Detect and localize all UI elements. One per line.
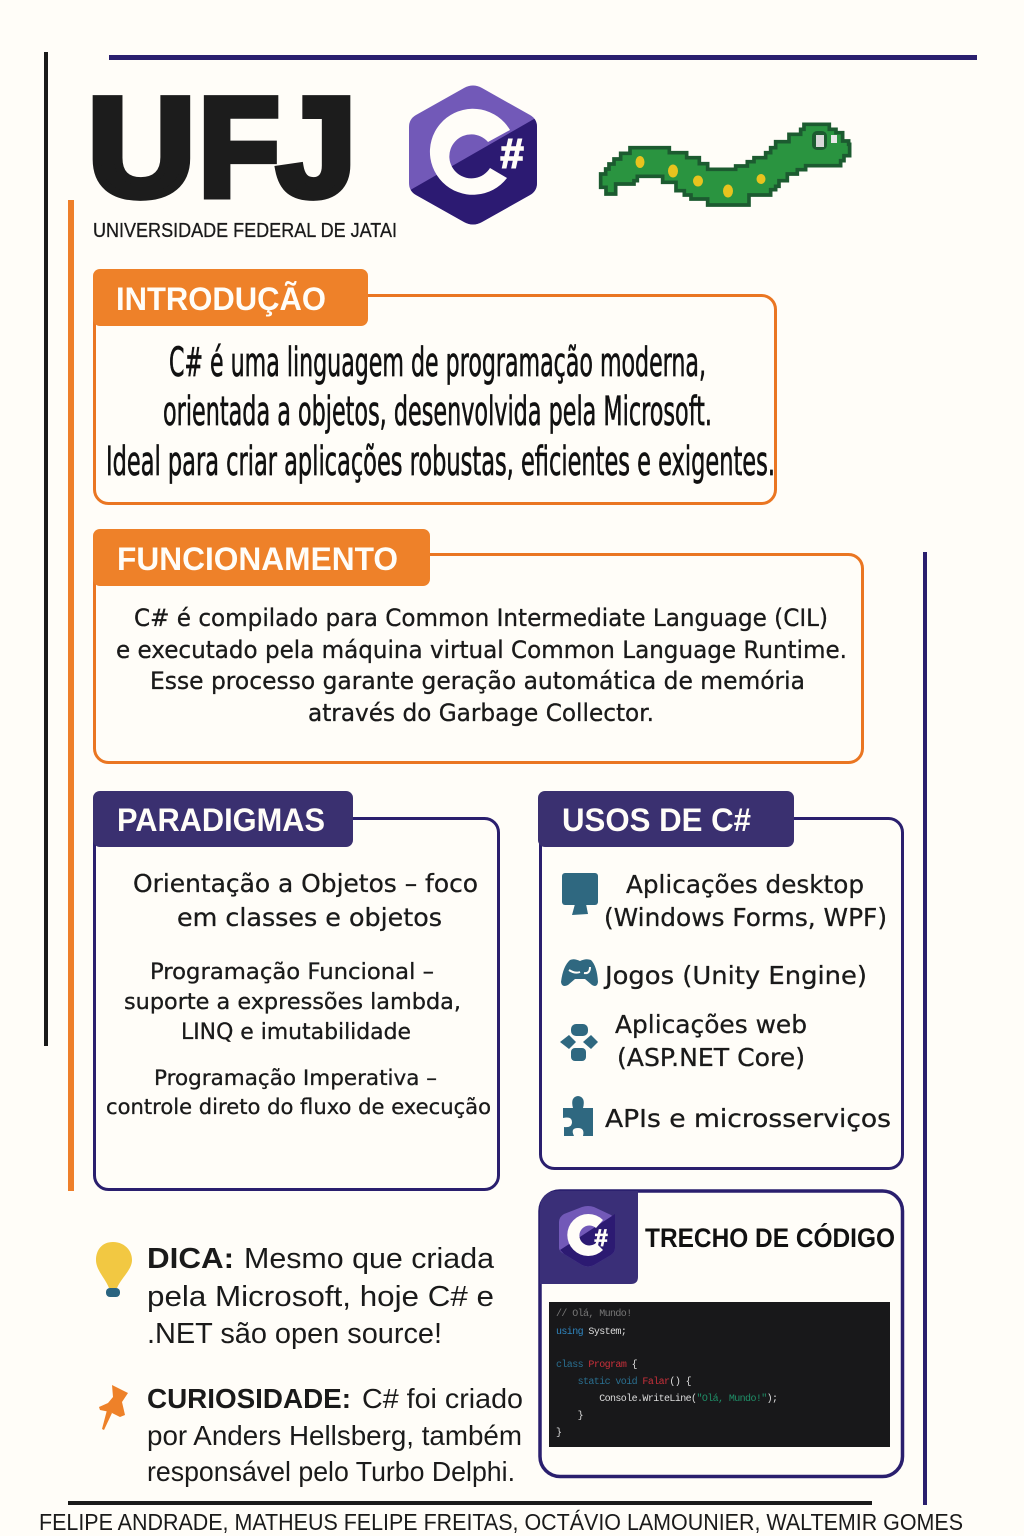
heading: introdução bbox=[93, 269, 368, 326]
icon: C# logo: # bbox=[500, 130, 524, 177]
panel: usos de C# bbox=[538, 791, 902, 1168]
text: aplicações web: (ASP.NET Core) bbox=[617, 1043, 805, 1072]
heading: introdução: INTRODUÇÃO bbox=[116, 281, 326, 317]
code block bbox=[549, 1302, 890, 1447]
code block: // Olá, Mundo! bbox=[556, 1308, 632, 1320]
panel: funcionamento bbox=[93, 529, 862, 762]
icon: gamepad bbox=[561, 959, 598, 986]
text: paradigmas: controle direto do fluxo de execução bbox=[106, 1095, 491, 1119]
text: aplicações web bbox=[615, 1010, 807, 1072]
panel: paradigmas bbox=[93, 791, 498, 1190]
text: dica: DICA: bbox=[147, 1243, 234, 1275]
text: aplicações desktop bbox=[604, 870, 887, 932]
text: introdução bbox=[106, 340, 775, 485]
text: funcionamento: Esse processo garante geração automática de memória bbox=[150, 667, 805, 695]
text: aplicações desktop: Aplicações desktop bbox=[626, 870, 864, 899]
logo: UFJ: J bbox=[277, 68, 356, 226]
text: jogos: Jogos (Unity Engine) bbox=[603, 961, 867, 990]
text: curiosidade bbox=[147, 1383, 523, 1487]
text: paradigmas: suporte a expressões lambda, bbox=[124, 990, 461, 1015]
text: dica: Mesmo que criada bbox=[244, 1243, 495, 1275]
icon: push pin bbox=[99, 1385, 128, 1430]
text: funcionamento bbox=[116, 604, 847, 727]
text: paradigmas: em classes e objetos bbox=[177, 903, 442, 932]
text: dica: .NET são open source! bbox=[147, 1318, 442, 1350]
text: curiosidade: CURIOSIDADE: bbox=[147, 1383, 351, 1414]
text: dica bbox=[147, 1243, 495, 1350]
text: aplicações desktop: (Windows Forms, WPF) bbox=[604, 903, 887, 932]
text: paradigmas: Programação Imperativa – bbox=[154, 1066, 437, 1090]
text: funcionamento: através do Garbage Collector. bbox=[308, 699, 654, 727]
heading: paradigmas: PARADIGMAS bbox=[117, 802, 325, 838]
logo: UFJ: F bbox=[199, 68, 279, 226]
icon: C# logo bbox=[409, 86, 537, 224]
logo: UFJ: UNIVERSIDADE FEDERAL DE JATAI bbox=[93, 220, 397, 242]
logo: UFJ: U bbox=[88, 68, 195, 226]
heading: funcionamento bbox=[93, 529, 430, 586]
text: paradigmas: LINQ e imutabilidade bbox=[181, 1020, 411, 1045]
text: paradigmas bbox=[106, 869, 491, 1119]
footer: authors: FELIPE ANDRADE, MATHEUS FELIPE FREITAS, OCTÁVIO LAMOUNIER, WALTEMIR GOMES bbox=[39, 1509, 963, 1535]
tab with C# logo bbox=[540, 1191, 638, 1284]
code block: } bbox=[556, 1427, 561, 1439]
heading: funcionamento: FUNCIONAMENTO bbox=[117, 541, 398, 577]
code block: static void Falar() { bbox=[556, 1376, 692, 1388]
icon: web nodes bbox=[560, 1024, 598, 1061]
icon: pixel snake bbox=[601, 124, 850, 205]
logo: UFJ bbox=[88, 68, 397, 242]
icon: monitor bbox=[562, 873, 598, 915]
text: funcionamento: C# é compilado para Common Intermediate Language (CIL) bbox=[134, 604, 828, 632]
icon: puzzle piece bbox=[563, 1096, 593, 1136]
code block: class Program { bbox=[556, 1359, 638, 1371]
heading: paradigmas bbox=[93, 791, 353, 847]
text: curiosidade: C# foi criado bbox=[362, 1383, 523, 1414]
heading: usos de C#: USOS DE C# bbox=[562, 802, 751, 838]
text: funcionamento: e executado pela máquina virtual Common Language Runtime. bbox=[116, 636, 847, 664]
code block: Console.WriteLine("Olá, Mundo!"); bbox=[556, 1393, 777, 1405]
heading: trecho de código: TRECHO DE CÓDIGO bbox=[645, 1222, 895, 1253]
text: curiosidade: responsável pelo Turbo Delphi. bbox=[147, 1456, 515, 1487]
text: paradigmas: Orientação a Objetos – foco bbox=[133, 869, 478, 898]
code block: using System; bbox=[556, 1326, 626, 1338]
text: curiosidade: por Anders Hellsberg, também bbox=[147, 1420, 522, 1451]
panel: introdução bbox=[93, 269, 776, 504]
tab with C# logo: # bbox=[594, 1225, 608, 1252]
text: apis: APIs e microsserviços bbox=[605, 1104, 891, 1133]
icon: light bulb bbox=[96, 1242, 132, 1297]
text: aplicações web: Aplicações web bbox=[615, 1010, 807, 1039]
heading: usos de C# bbox=[538, 791, 794, 847]
code block: } bbox=[556, 1410, 583, 1422]
panel: trecho de código bbox=[540, 1191, 902, 1476]
text: dica: pela Microsoft, hoje C# e bbox=[147, 1281, 494, 1313]
text: paradigmas: Programação Funcional – bbox=[150, 960, 434, 985]
